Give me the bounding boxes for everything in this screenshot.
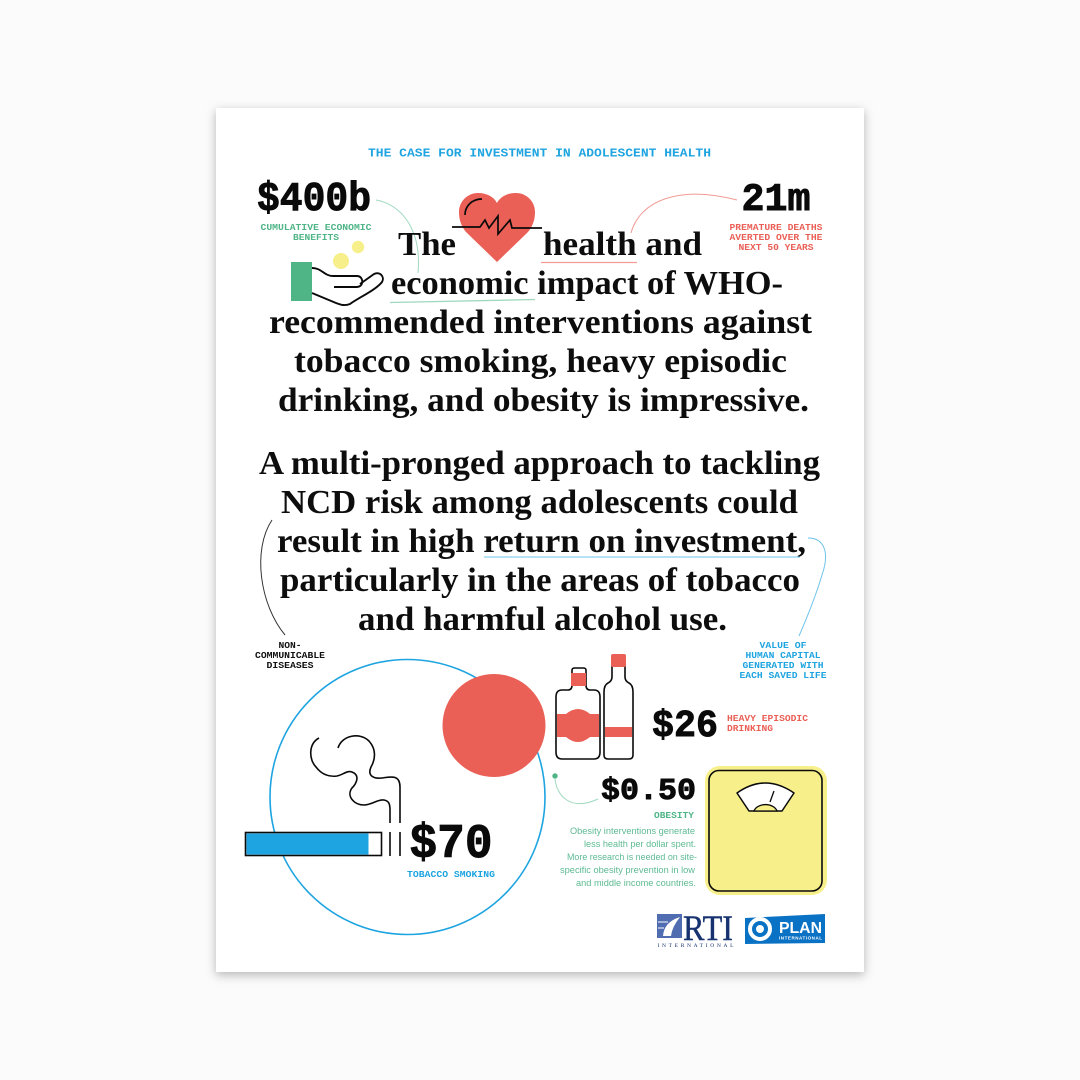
label: heavy episodic drinking [727, 713, 808, 734]
second paragraph: NCD risk among adolescents could [281, 484, 798, 521]
text block: obesity note: Obesity interventions generate [570, 825, 695, 836]
second paragraph: A multi-pronged approach to tackling [259, 445, 820, 482]
text block: obesity note: More research is needed on site- [567, 851, 697, 862]
icon: cigarette and smoke [246, 736, 400, 856]
second paragraph: particularly in the areas of tobacco [280, 562, 800, 599]
poster panel [216, 108, 864, 972]
logo: RTI International [657, 908, 734, 949]
title: THE CASE FOR INVESTMENT IN ADOLESCENT HEALTH [368, 146, 711, 160]
label: value of human capital [740, 640, 827, 681]
stat: $400b [257, 177, 372, 243]
label: value of human capital: VALUE OF [760, 640, 807, 651]
stat: 21m: NEXT 50 YEARS [738, 242, 814, 253]
second paragraph: and harmful alcohol use. [358, 601, 727, 638]
connector: 21m to health [631, 194, 737, 233]
text block: obesity note: specific obesity prevention in low [560, 864, 695, 875]
headline paragraph: health and [543, 226, 702, 263]
stat: $0.50: $0.50 [601, 774, 696, 809]
label: heavy episodic drinking: HEAVY EPISODIC [727, 713, 808, 724]
label: value of human capital: EACH SAVED LIFE [740, 670, 827, 681]
text block: obesity note [560, 825, 697, 888]
logo: Plan International: INTERNATIONAL [779, 936, 822, 940]
stat: $26: $26 [652, 705, 718, 748]
connector: $400b to economic [376, 200, 418, 273]
stat: 21m: AVERTED OVER THE [730, 232, 823, 243]
label: obesity: OBESITY [654, 810, 694, 821]
logo: Plan International [745, 914, 825, 944]
icon: bottles [556, 654, 633, 759]
underline: return on investment [484, 556, 800, 558]
headline paragraph [269, 226, 813, 419]
blue circle [270, 660, 545, 934]
logo: Plan International: PLAN [779, 920, 822, 937]
label: value of human capital: HUMAN CAPITAL [746, 650, 821, 661]
label: non-communicable diseases [255, 640, 325, 671]
second paragraph: result in high return on investment, [277, 523, 806, 560]
second paragraph [259, 445, 820, 638]
headline paragraph: tobacco smoking, heavy episodic [294, 343, 787, 380]
label: non-communicable diseases: COMMUNICABLE [255, 650, 325, 661]
connector: obesity dot [552, 773, 598, 804]
stat: $400b: $400b [257, 177, 371, 223]
label: non-communicable diseases: DISEASES [266, 660, 314, 671]
label: heavy episodic drinking: DRINKING [727, 723, 773, 734]
stat: $400b: CUMULATIVE ECONOMIC [260, 222, 372, 233]
logo: RTI International: RTI [683, 908, 733, 948]
label: value of human capital: GENERATED WITH [742, 660, 824, 671]
stat: $400b: BENEFITS [293, 232, 339, 243]
red circle [442, 674, 546, 777]
headline paragraph: drinking, and obesity is impressive. [278, 382, 809, 419]
headline paragraph: recommended interventions against [269, 304, 813, 341]
text block: obesity note: and middle income countries. [576, 877, 696, 888]
connector: NCD label [261, 520, 285, 635]
text block: obesity note: less health per dollar spent. [584, 838, 696, 849]
underline: economic [390, 300, 535, 302]
icon: open hand with coins [291, 241, 383, 305]
headline paragraph: economic impact of WHO- [391, 265, 783, 302]
stat: 21m [730, 178, 823, 253]
label: non-communicable diseases: NON- [278, 640, 302, 651]
label: tobacco smoking: TOBACCO SMOKING [407, 869, 495, 880]
icon: bathroom scale [705, 766, 827, 895]
headline paragraph: The [398, 226, 456, 263]
stat: 21m: 21m [742, 178, 810, 222]
logo: RTI International: INTERNATIONAL [658, 943, 734, 949]
underline: health [541, 262, 637, 264]
stat: 21m: PREMATURE DEATHS [730, 222, 823, 233]
icon: heart with pulse [452, 193, 542, 262]
connector: human capital label [799, 538, 826, 636]
stat: $70: $70 [410, 818, 492, 872]
